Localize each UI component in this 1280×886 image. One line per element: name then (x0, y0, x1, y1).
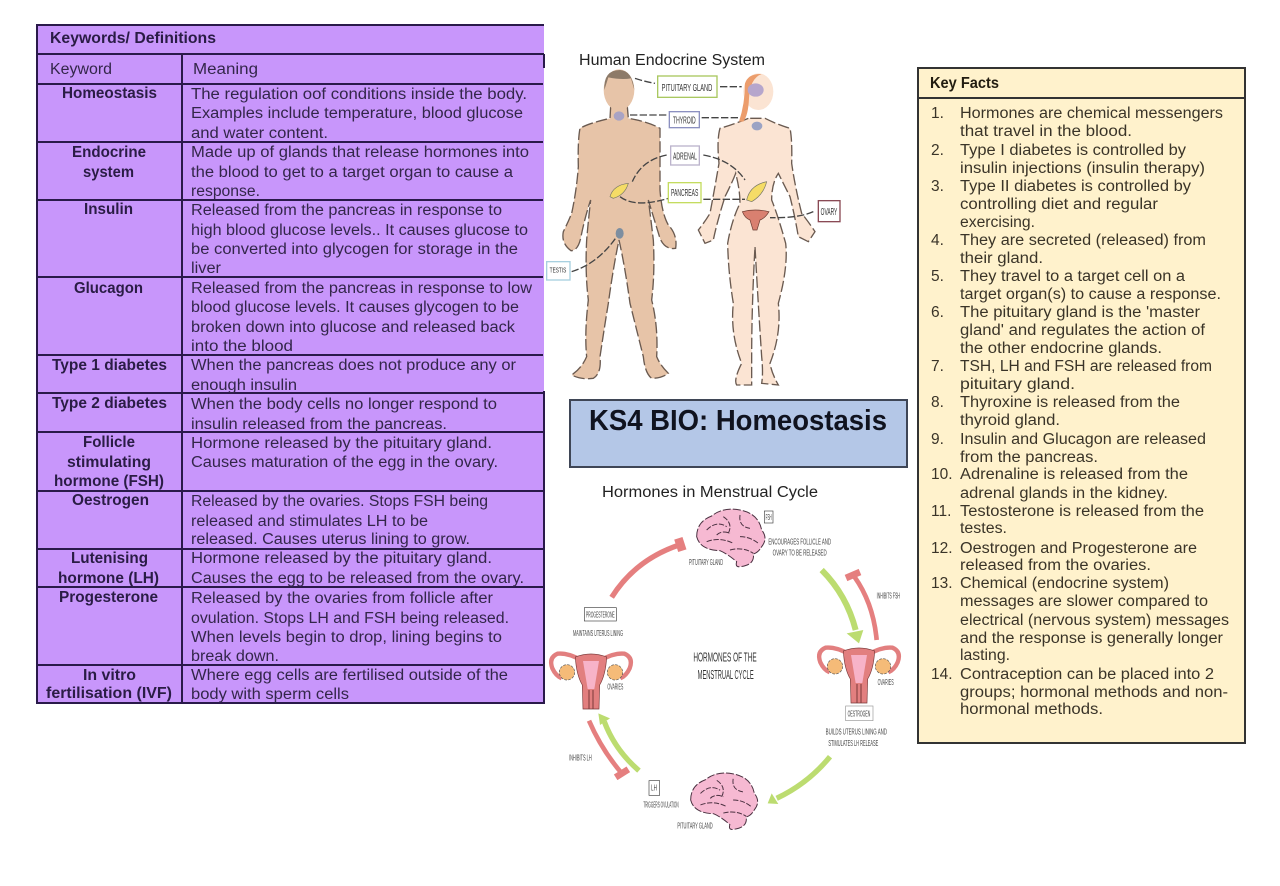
fact 13 (931, 575, 1229, 664)
row: homeostasis: Homeostasis (62, 85, 157, 102)
arrow: lh inhibits (589, 721, 628, 777)
fact 1: Hormones are chemical messengers (960, 105, 1223, 122)
panel: key facts (918, 68, 1245, 743)
label: adrenal: ADRENAL (673, 151, 697, 162)
row: lutenising hormone: hormone (LH) (58, 570, 159, 587)
diagram: menstrual cycle: FSH (766, 513, 772, 522)
title banner (570, 400, 907, 467)
row: endocrine system (72, 144, 529, 200)
fact 4 (931, 232, 1206, 267)
diagram: menstrual cycle: TRIGGERS OVULATION (643, 801, 679, 810)
label: testis: TESTIS (550, 266, 566, 275)
row: insulin: Insulin (84, 201, 133, 218)
row: homeostasis: The regulation oof conditions inside the body. (191, 86, 527, 103)
diagram: menstrual cycle: PITUITARY GLAND (689, 558, 723, 567)
fact 10: Adrenaline is released from the (960, 466, 1188, 483)
fact 12: 12. (931, 540, 953, 557)
row: follicle stimulating hormone: stimulating (67, 454, 151, 471)
fact 1: that travel in the blood. (960, 123, 1132, 140)
row: oestrogen: Oestrogen (72, 492, 149, 509)
row: endocrine system: Made up of glands that release hormones into (191, 144, 529, 161)
label: thyroid: THYROID (673, 115, 696, 126)
center label: hormones of the menstrual cycle (693, 651, 757, 682)
fact 3: exercising. (960, 214, 1035, 231)
fact 5: target organ(s) to cause a response. (960, 286, 1221, 303)
row: lutenising hormone (58, 550, 524, 587)
fact 3: controlling diet and regular (960, 196, 1158, 213)
row: follicle stimulating hormone: Causes maturation of the egg in the ovary. (191, 454, 498, 471)
label: progesterone (584, 608, 616, 621)
fact 2: 2. (931, 142, 944, 159)
row: insulin: be converted into glycogen for storage in the (191, 241, 518, 258)
icon: uterus and ovaries right (819, 648, 899, 703)
arrow: lh stimulates ovulation (598, 713, 639, 771)
heading: key facts: Key Facts (930, 75, 999, 92)
fact 12: released from the ovaries. (960, 557, 1151, 574)
row: glucagon: Glucagon (74, 280, 143, 297)
row: follicle stimulating hormone: hormone (FSH) (54, 473, 164, 490)
column heading: keyword: Keyword (50, 61, 112, 78)
title banner: KS4 BIO: Homeostasis (589, 405, 887, 437)
row: type 2 diabetes: insulin released from the pancreas. (191, 416, 447, 433)
fact 7: TSH, LH and FSH are released from (960, 358, 1212, 375)
fact 6: the other endocrine glands. (960, 340, 1162, 357)
caption: oestrogen effect: STIMULATES LH RELEASE (828, 739, 878, 748)
caption: follicle text: OVARY TO BE RELEASED (773, 549, 827, 558)
row: type 1 diabetes: Type 1 diabetes (52, 357, 167, 374)
row: in vitro fertilisation: body with sperm cells (191, 686, 349, 703)
diagram: menstrual cycle: PROGESTERONE (586, 610, 615, 619)
row: lutenising hormone: Causes the egg to be released from the ovary. (191, 570, 524, 587)
row: type 1 diabetes (52, 357, 516, 394)
fact 11: testes. (960, 520, 1007, 537)
row: type 1 diabetes: When the pancreas does not produce any or (191, 357, 516, 374)
fact 14: Contraception can be placed into 2 (960, 666, 1214, 683)
caption: oestrogen effect (826, 727, 887, 748)
caption: follicle text (768, 537, 831, 558)
fact 3 (931, 178, 1191, 231)
fact 9: 9. (931, 431, 944, 448)
fact 14: hormonal methods. (960, 701, 1103, 718)
label: pituitary gland (658, 76, 717, 97)
row: glucagon: Released from the pancreas in response to low (191, 280, 533, 297)
panel: keywords and definitions table (37, 24, 544, 704)
fact 4: They are secreted (released) from (960, 232, 1206, 249)
fact 11: 11. (931, 503, 951, 520)
leader lines (572, 78, 813, 272)
fact 6: gland' and regulates the action of (960, 322, 1206, 339)
fact 9: from the pancreas. (960, 449, 1098, 466)
fact 8 (931, 394, 1180, 429)
row: progesterone: ovulation. Stops LH and FSH being released. (191, 610, 509, 627)
fact 7: pituitary gland. (960, 376, 1075, 393)
row: progesterone: When levels begin to drop, lining begins to (191, 629, 502, 646)
fact 7 (931, 358, 1212, 393)
row: type 2 diabetes: When the body cells no longer respond to (191, 396, 497, 413)
row: endocrine system: response. (191, 183, 260, 200)
label: pancreas (668, 183, 701, 203)
fact 13: 13. (931, 575, 953, 592)
row: in vitro fertilisation: Where egg cells are fertilised outside of the (191, 667, 508, 684)
heading: human endocrine system: Human Endocrine System (579, 52, 765, 69)
fact 2 (931, 142, 1205, 177)
fact 11 (931, 503, 1204, 537)
row: in vitro fertilisation (46, 667, 508, 703)
label: fsh (764, 511, 773, 523)
fact 13: and the response is generally longer (960, 630, 1223, 647)
fact 8: 8. (931, 394, 944, 411)
row: lutenising hormone: Lutenising (71, 550, 148, 567)
row: oestrogen (72, 492, 488, 548)
fact 14 (931, 666, 1228, 718)
diagram: menstrual cycle: OVARIES (878, 678, 894, 687)
row: homeostasis: Examples include temperature, blood glucose (191, 105, 523, 122)
row: lutenising hormone: Hormone released by the pituitary gland. (191, 550, 492, 567)
column heading: meaning: Meaning (193, 61, 258, 78)
row: insulin: Released from the pancreas in response to (191, 202, 502, 219)
center label: hormones of the menstrual cycle: HORMONES OF THE (693, 651, 757, 665)
row: endocrine system: Endocrine (72, 144, 146, 161)
label: lh (649, 781, 660, 795)
fact 2: insulin injections (insulin therapy) (960, 160, 1205, 177)
row: type 2 diabetes (52, 395, 497, 433)
fact 14: groups; hormonal methods and non- (960, 684, 1228, 701)
fact 1: 1. (931, 105, 944, 122)
icon: pituitary brain bottom (691, 773, 758, 829)
row: oestrogen: released and stimulates LH to be (191, 513, 428, 530)
fact 4: their gland. (960, 250, 1043, 267)
fact 11: Testosterone is released from the (960, 503, 1204, 520)
arrow: progesterone inhibits pituitary (612, 538, 682, 597)
fact 10: 10. (931, 466, 953, 483)
fact 3: 3. (931, 178, 944, 195)
row: progesterone: Released by the ovaries from follicle after (191, 590, 493, 607)
fact 2: Type I diabetes is controlled by (960, 142, 1186, 159)
fact 9 (931, 431, 1206, 466)
fact 6: The pituitary gland is the 'master (960, 304, 1200, 321)
fact 10 (931, 466, 1188, 502)
fact 12: Oestrogen and Progesterone are (960, 540, 1197, 557)
icon: uterus and ovaries left (551, 654, 631, 709)
row: follicle stimulating hormone: Hormone released by the pituitary gland. (191, 435, 492, 452)
fact 6 (931, 304, 1206, 357)
diagram: human endocrine system (547, 69, 840, 385)
row: in vitro fertilisation: fertilisation (IVF) (46, 685, 172, 702)
row: glucagon: into the blood (191, 338, 293, 355)
fact 13: messages are slower compared to (960, 593, 1208, 610)
diagram: menstrual cycle: MAINTAINS UTERUS LINING (573, 629, 623, 638)
fact 7: 7. (931, 358, 944, 375)
arrow: oestrogen inhibits fsh (846, 572, 877, 640)
row: follicle stimulating hormone (54, 434, 498, 490)
arrow: fsh stimulates ovaries (822, 570, 863, 643)
label: oestrogen (846, 706, 873, 721)
label: adrenal (671, 146, 699, 165)
row: homeostasis (62, 85, 527, 142)
fact 6: 6. (931, 304, 944, 321)
fact 3: Type II diabetes is controlled by (960, 178, 1191, 195)
row: endocrine system: system (83, 164, 134, 181)
row: in vitro fertilisation: In vitro (83, 667, 136, 684)
row: oestrogen: released. Causes uterus lining to grow. (191, 531, 470, 548)
row: insulin: liver (191, 260, 221, 277)
row: endocrine system: the blood to get to a target organ to cause a (191, 164, 513, 181)
label: pituitary gland: PITUITARY GLAND (662, 83, 712, 94)
row: glucagon: blood glucose levels. It causes glycogen to be (191, 299, 519, 316)
fact 1 (931, 105, 1223, 140)
fact 10: adrenal glands in the kidney. (960, 485, 1168, 502)
caption: oestrogen effect: BUILDS UTERUS LINING AND (826, 727, 887, 736)
figure: female body (698, 73, 815, 385)
fact 8: Thyroxine is released from the (960, 394, 1180, 411)
row: type 1 diabetes: enough insulin (191, 377, 297, 394)
diagram: menstrual cycle: OESTROGEN (848, 710, 870, 719)
text: INHIBITS FSH (877, 591, 900, 600)
row: progesterone (59, 589, 509, 665)
fact 13: electrical (nervous system) messages (960, 612, 1229, 629)
label: pancreas: PANCREAS (671, 188, 699, 199)
diagram: menstrual cycle: OVARIES (607, 682, 623, 691)
fact 12 (931, 540, 1197, 574)
heading: hormones in menstrual cycle: Hormones in Menstrual Cycle (602, 484, 818, 501)
row: insulin (84, 201, 528, 277)
fact 8: thyroid gland. (960, 412, 1060, 429)
row: insulin: high blood glucose levels.. It causes glucose to (191, 222, 528, 239)
row: glucagon: broken down into glucose and released back (191, 319, 515, 336)
caption: pituitary gland bottom: PITUITARY GLAND (677, 822, 713, 831)
row: homeostasis: and water content. (191, 125, 328, 142)
label: thyroid (669, 112, 699, 128)
label: ovary (818, 201, 840, 222)
row: follicle stimulating hormone: Follicle (83, 434, 135, 451)
diagram: menstrual cycle (551, 509, 900, 831)
fact 14: 14. (931, 666, 953, 683)
fact 5: They travel to a target cell on a (960, 268, 1185, 285)
icon: pituitary brain top (697, 509, 765, 567)
label: lh: LH (651, 784, 657, 793)
row: glucagon (74, 280, 533, 355)
label: testis (547, 262, 570, 280)
caption: follicle text: ENCOURAGES FOLLICLE AND (768, 537, 831, 546)
fact 9: Insulin and Glucagon are released (960, 431, 1206, 448)
fact 4: 4. (931, 232, 944, 249)
arrow: oestrogen stimulates lh (768, 757, 830, 804)
diagram: menstrual cycle: MENSTRUAL CYCLE (698, 668, 754, 682)
fact 5: 5. (931, 268, 944, 285)
fact 5 (931, 268, 1221, 303)
fact 13: lasting. (960, 647, 1010, 664)
row: oestrogen: Released by the ovaries. Stops FSH being (191, 493, 488, 510)
diagram: menstrual cycle: INHIBITS LH (569, 754, 592, 763)
label: ovary: OVARY (821, 207, 837, 218)
heading: keywords and definitions: Keywords/ Definitions (50, 30, 216, 47)
row: progesterone: break down. (191, 648, 279, 665)
row: progesterone: Progesterone (59, 589, 158, 606)
figure: male body (563, 69, 676, 379)
row: type 2 diabetes: Type 2 diabetes (52, 395, 167, 412)
fact 13: Chemical (endocrine system) (960, 575, 1169, 592)
